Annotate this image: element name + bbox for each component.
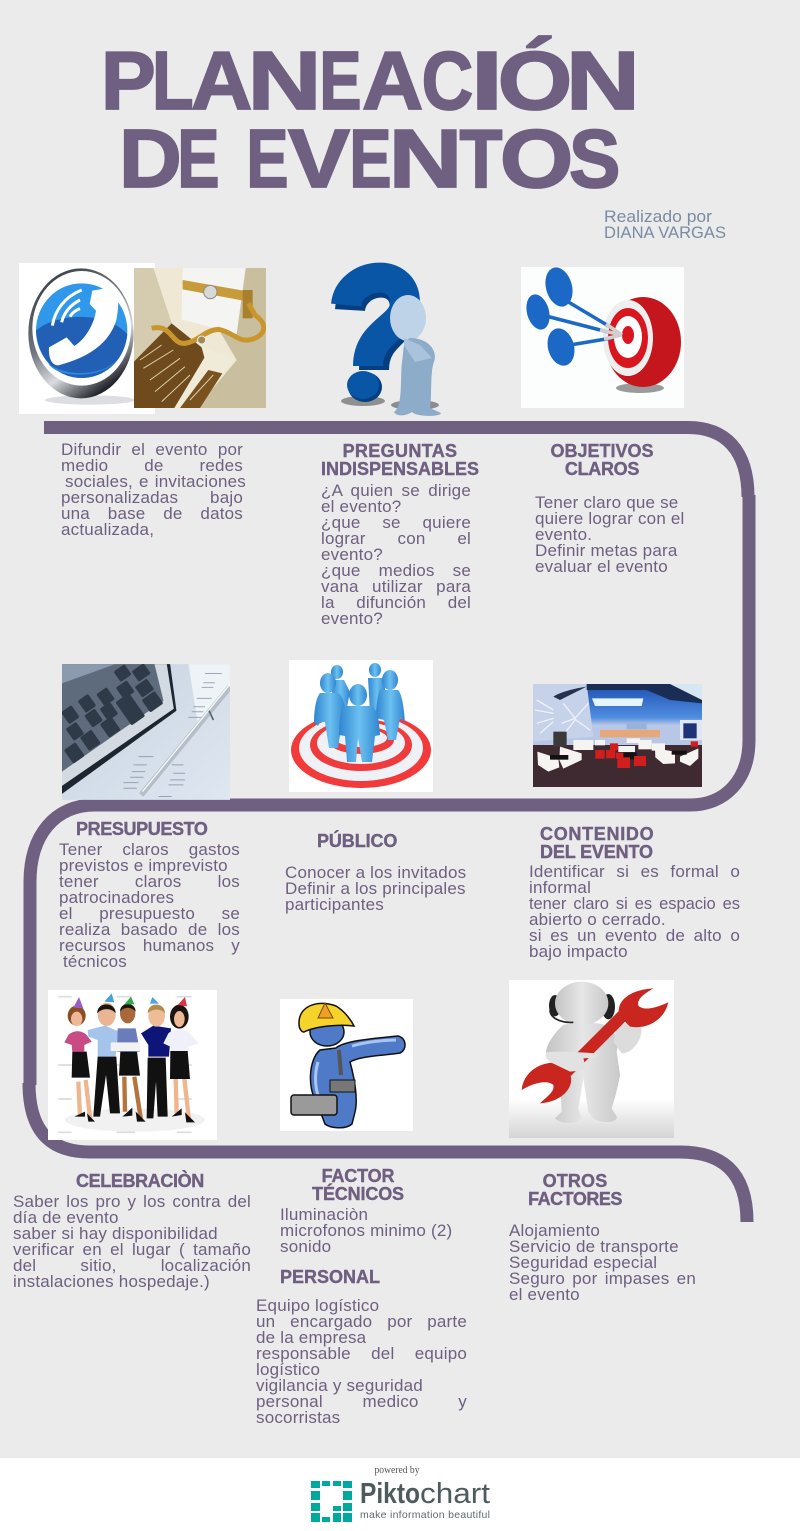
title: E (177, 112, 220, 205)
body text: factor técnicos: sonido (280, 1237, 331, 1256)
heading: factor técnicos: TÉCNICOS (312, 1184, 404, 1204)
body text: otros factores: Servicio de transporte (509, 1237, 679, 1256)
body text: contenido (529, 862, 740, 961)
body text: público: Definir a los principales (285, 879, 466, 898)
icon: telephone button (19, 263, 155, 414)
figure: woman in white top (163, 997, 198, 1122)
body text: otros factores: el evento (509, 1285, 580, 1304)
heading: personal: PERSONAL (280, 1267, 380, 1287)
title: I (471, 34, 503, 127)
body text: celebración: del sitio, localización (13, 1256, 251, 1275)
title: P (101, 34, 156, 127)
title: E (319, 34, 362, 127)
body text: presupuesto: patrocinadores (59, 888, 174, 907)
title: C (422, 34, 473, 127)
body text: presupuesto (59, 840, 240, 971)
body text: difusión: una base de datos (61, 504, 243, 523)
body text: objetivos (535, 493, 685, 576)
body text: presupuesto: realiza basado de los (59, 920, 240, 939)
body text: contenido: bajo impacto (529, 942, 628, 961)
body text: público: participantes (285, 895, 384, 914)
body text: personal: logístico (256, 1360, 320, 1379)
body text: celebración: día de evento (13, 1208, 119, 1227)
panel: personal (256, 1267, 467, 1427)
body text: preguntas: lograr con el (321, 529, 471, 548)
panel: factor técnicos (280, 1166, 452, 1256)
icon: darts on target (521, 264, 684, 408)
body text: presupuesto: previstos e imprevisto (59, 856, 228, 875)
body text: difusión: personalizadas bajo (61, 488, 243, 507)
body text: difusión: sociales, e invitaciones (65, 472, 246, 491)
title: V (288, 112, 350, 205)
body text: personal: responsable del equipo (256, 1344, 467, 1363)
title: E (246, 112, 288, 205)
author credit: DIANA VARGAS (604, 223, 726, 242)
title (101, 34, 640, 205)
photo: invitation card (134, 268, 266, 408)
author credit: Realizado por (604, 207, 712, 226)
body text: contenido: Identificar si es formal o (529, 862, 740, 881)
heading: preguntas indispensables: PREGUNTAS (343, 441, 457, 461)
title: E (349, 112, 392, 205)
heading: otros factores: OTROS (543, 1171, 607, 1191)
icon: technician with toolbox (280, 999, 413, 1131)
title: O (500, 112, 573, 205)
body text: objetivos: quiere lograr con el (535, 509, 685, 528)
title: N (389, 112, 462, 205)
title: Ó (498, 34, 572, 127)
body text: presupuesto: Tener claros gastos (59, 840, 240, 859)
body text: preguntas: ¿que se quiere (321, 513, 471, 532)
heading: factor técnicos (312, 1166, 404, 1204)
panel: público (285, 830, 466, 914)
body text: contenido: informal (529, 878, 591, 897)
body text: objetivos: evento. (535, 525, 592, 544)
body text: factor técnicos: microfonos minimo (2) (280, 1221, 452, 1240)
body text: celebración: instalaciones hospedaje.) (13, 1272, 210, 1291)
body text: factor técnicos (280, 1205, 452, 1256)
body text: celebración: verificar en el lugar ( tamaño (13, 1240, 251, 1259)
heading: otros factores: FACTORES (528, 1189, 622, 1209)
body text: preguntas (321, 481, 471, 628)
body text: contenido: abierto o cerrado. (529, 910, 666, 929)
body text: objetivos: Definir metas para (535, 541, 678, 560)
panel: presupuesto (59, 819, 240, 971)
body text: personal: socorristas (256, 1408, 340, 1427)
footer band (0, 1458, 800, 1531)
icon: question mark with thinking figure (341, 278, 441, 416)
body text: personal: vigilancia y seguridad (256, 1376, 423, 1395)
icon: figure with wrench (509, 980, 674, 1138)
panel: preguntas indispensables (321, 441, 479, 628)
body text: preguntas: ¿A quien se dirige (321, 481, 471, 500)
body text: presupuesto: técnicos (63, 952, 127, 971)
body text: personal (256, 1296, 467, 1427)
title: A (362, 34, 423, 127)
body text: contenido: tener claro si es espacio es (529, 895, 740, 913)
heading: preguntas indispensables (321, 441, 479, 479)
heading: contenido del evento (540, 824, 654, 862)
body text: celebración: saber si hay disponibilidad (13, 1224, 218, 1243)
logo: Piktochart: make information beautiful (360, 1509, 490, 1521)
heading: público: PÚBLICO (317, 831, 397, 851)
body text: preguntas: el evento? (321, 497, 401, 516)
body text: factor técnicos: Iluminaciòn (280, 1205, 368, 1224)
body text: difusión: actualizada, (61, 520, 154, 539)
body text: otros factores: Alojamiento (509, 1221, 600, 1240)
heading: contenido del evento: DEL EVENTO (540, 842, 653, 862)
panel: celebración (13, 1170, 251, 1291)
figure: man in navy shirt (141, 997, 171, 1118)
body text: contenido: si es un evento de alto o (529, 926, 740, 945)
body text: preguntas: vana utilizar para (321, 577, 471, 596)
body text: difusión (61, 440, 246, 539)
body text: presupuesto: tener claros los (59, 872, 240, 891)
logo: Piktochart: Pikto (360, 1478, 420, 1510)
body text: personal: de la empresa (256, 1328, 366, 1347)
title: N (248, 34, 321, 127)
heading: objetivos claros: CLAROS (565, 459, 639, 479)
body text: presupuesto: recursos humanos y (59, 936, 240, 955)
heading: factor técnicos: FACTOR (322, 1166, 394, 1186)
heading: contenido del evento: CONTENIDO (540, 824, 654, 844)
body text: personal: Equipo logístico (256, 1296, 379, 1315)
body text: difusión: Difundir el evento por (61, 440, 243, 459)
body text: personal: personal medico y (256, 1392, 467, 1411)
heading: objetivos claros: OBJETIVOS (550, 441, 654, 461)
heading: objetivos claros (550, 441, 654, 479)
logo: Piktochart: powered by (374, 1465, 420, 1476)
body text: otros factores: Seguro por impases en (509, 1269, 696, 1288)
title: N (566, 34, 640, 127)
body text: preguntas: evento? (321, 609, 383, 628)
body text: difusión: medio de redes (61, 456, 243, 475)
track: purple winding path (29, 428, 749, 1222)
figure: man in blue shirt (88, 993, 120, 1117)
logo: Piktochart (311, 1465, 490, 1522)
body text: objetivos: evaluar el evento (535, 557, 668, 576)
icon: people on target (289, 660, 433, 792)
title: A (191, 34, 252, 127)
title: S (569, 112, 620, 205)
title: L (152, 34, 194, 127)
body text: otros factores: Seguridad especial (509, 1253, 657, 1272)
icon: celebration group (48, 990, 217, 1140)
body text: público (285, 863, 466, 914)
photo: event hall (533, 684, 702, 787)
body text: presupuesto: el presupuesto se (59, 904, 240, 923)
body text: otros factores (509, 1221, 696, 1304)
figure: woman in pink (64, 997, 95, 1122)
author credit (604, 207, 726, 242)
heading: otros factores (528, 1171, 622, 1209)
panel: otros factores (509, 1171, 696, 1304)
figure: woman with cake (111, 997, 146, 1122)
body text: público: Conocer a los invitados (285, 863, 466, 882)
title: T (460, 112, 502, 205)
body text: celebración (13, 1192, 251, 1291)
panel: difusión (61, 440, 246, 539)
heading: preguntas indispensables: INDISPENSABLES (321, 459, 479, 479)
body text: personal: un encargado por parte (256, 1312, 467, 1331)
panel: objetivos claros (535, 441, 685, 576)
body text: objetivos: Tener claro que se (535, 493, 678, 512)
heading: celebración: CELEBRACIÒN (76, 1171, 204, 1191)
body text: preguntas: evento? (321, 545, 383, 564)
body text: celebración: Saber los pro y los contra del (13, 1192, 251, 1211)
body text: preguntas: la difunción del (321, 593, 471, 612)
photo: calculator and pen (61, 663, 230, 800)
logo: Piktochart: chart (420, 1478, 490, 1510)
panel: contenido del evento (529, 824, 740, 961)
title: D (119, 112, 182, 205)
body text: preguntas: ¿que medios se (321, 561, 471, 580)
heading: presupuesto: PRESUPUESTO (76, 819, 208, 839)
